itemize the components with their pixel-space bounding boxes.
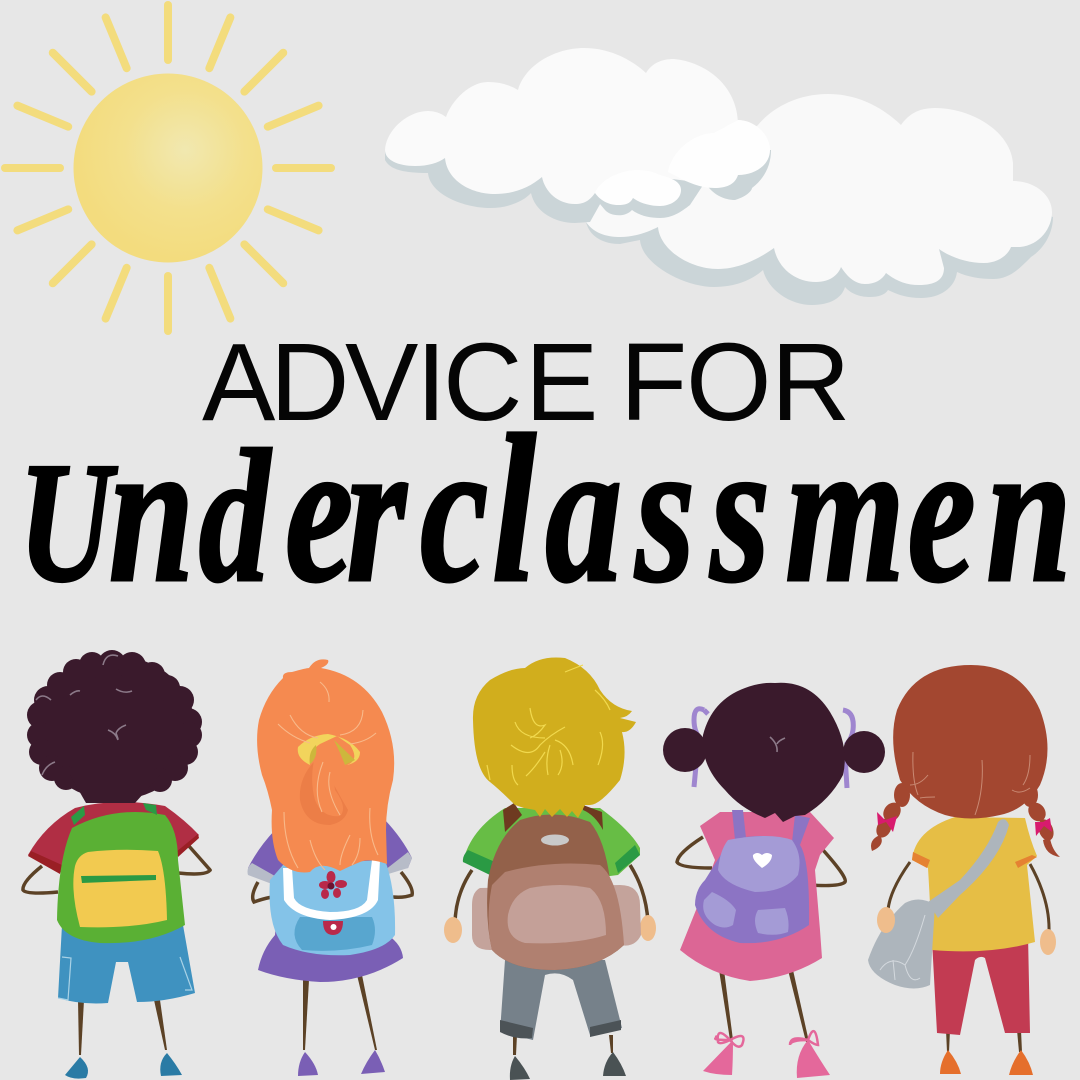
pink dress xyxy=(680,812,834,981)
heading: underclassmen: n xyxy=(109,399,194,625)
pink shoes with bows xyxy=(703,1031,830,1078)
backpack grey oval xyxy=(541,834,569,846)
flower xyxy=(319,871,347,899)
legs and feet xyxy=(65,1000,182,1079)
backpack straps xyxy=(71,803,157,825)
arms xyxy=(677,837,845,886)
arms xyxy=(253,872,412,902)
left cloud xyxy=(385,48,738,204)
character: girl with buns and purple backpack xyxy=(663,683,885,1078)
yellow ribbon xyxy=(298,734,360,765)
red tab xyxy=(323,921,343,935)
ponytail xyxy=(312,745,343,816)
green shirt xyxy=(463,808,640,890)
backpack pocket xyxy=(294,917,375,951)
hair buns xyxy=(663,728,885,773)
front puff large xyxy=(668,120,770,188)
backpack pockets xyxy=(703,892,789,935)
trouser cuffs xyxy=(500,1020,621,1038)
purple ribbons xyxy=(694,709,853,788)
sleeping roll xyxy=(472,885,641,950)
satchel seams xyxy=(880,915,925,980)
yellow shirt xyxy=(912,817,1037,951)
grey satchel xyxy=(868,899,935,988)
ponytail shadow xyxy=(300,756,348,825)
grey trousers xyxy=(500,960,622,1040)
character: blond boy with brown backpack xyxy=(444,657,656,1080)
arms xyxy=(23,845,210,893)
character: girl with braids and grey satchel xyxy=(868,665,1060,1075)
heading: underclassmen: erc xyxy=(285,399,488,625)
blond hair xyxy=(473,657,636,818)
white flap xyxy=(283,860,380,920)
hair strands xyxy=(278,682,378,870)
curly hair xyxy=(27,650,202,803)
brown backpack xyxy=(487,814,624,970)
legs and feet xyxy=(298,975,385,1076)
icon: sun xyxy=(5,5,331,331)
left cloud shadow xyxy=(385,130,608,223)
sleeve cuffs xyxy=(248,852,412,887)
auburn hair xyxy=(893,665,1048,818)
arms and hands xyxy=(444,865,656,943)
backpack lower panel xyxy=(488,864,624,970)
red shirt xyxy=(28,802,199,872)
heading: underclassmen: assmen xyxy=(545,399,1072,625)
hair parting xyxy=(770,737,785,752)
sleeve cuffs xyxy=(912,852,1037,868)
front puff small xyxy=(595,170,681,206)
character: red-haired girl with blue backpack xyxy=(248,659,412,1076)
icon: clouds xyxy=(385,48,1053,305)
long orange hair xyxy=(257,659,394,872)
hair strands xyxy=(910,752,1030,815)
shoulder strap xyxy=(928,819,1009,918)
backpack pocket xyxy=(508,885,606,943)
legs and feet xyxy=(510,1035,626,1080)
backpack straps xyxy=(732,810,810,845)
dark hair xyxy=(703,683,845,822)
red trousers xyxy=(932,935,1030,1035)
blue backpack xyxy=(270,860,395,955)
blue shorts xyxy=(58,925,195,1003)
purple backpack xyxy=(695,836,809,943)
right cloud shadow xyxy=(586,200,1053,305)
pink hair bows xyxy=(877,812,1052,836)
hair highlights xyxy=(36,655,132,775)
backpack flap xyxy=(718,836,800,892)
heart xyxy=(753,853,772,868)
arms and hands xyxy=(888,862,1049,932)
braids xyxy=(871,783,1060,857)
right cloud xyxy=(586,94,1052,285)
green backpack xyxy=(57,812,185,943)
backpack straps xyxy=(503,803,603,832)
heading: underclassmen: U xyxy=(19,427,118,617)
hands xyxy=(877,907,1056,955)
purple dress xyxy=(248,820,412,982)
heading: underclassmen: l xyxy=(492,391,536,626)
feet and legs xyxy=(940,1030,1033,1075)
yellow pocket xyxy=(73,850,167,927)
heading: underclassmen: d xyxy=(199,411,273,622)
heading: advice for: ADVICE FOR xyxy=(202,321,850,444)
character: curly-haired boy with green backpack xyxy=(23,650,210,1079)
zipper xyxy=(81,875,156,883)
legs xyxy=(719,970,809,1042)
shorts pockets xyxy=(58,957,192,1000)
hair swirl strands xyxy=(487,665,610,785)
front puff shadows xyxy=(595,150,771,218)
